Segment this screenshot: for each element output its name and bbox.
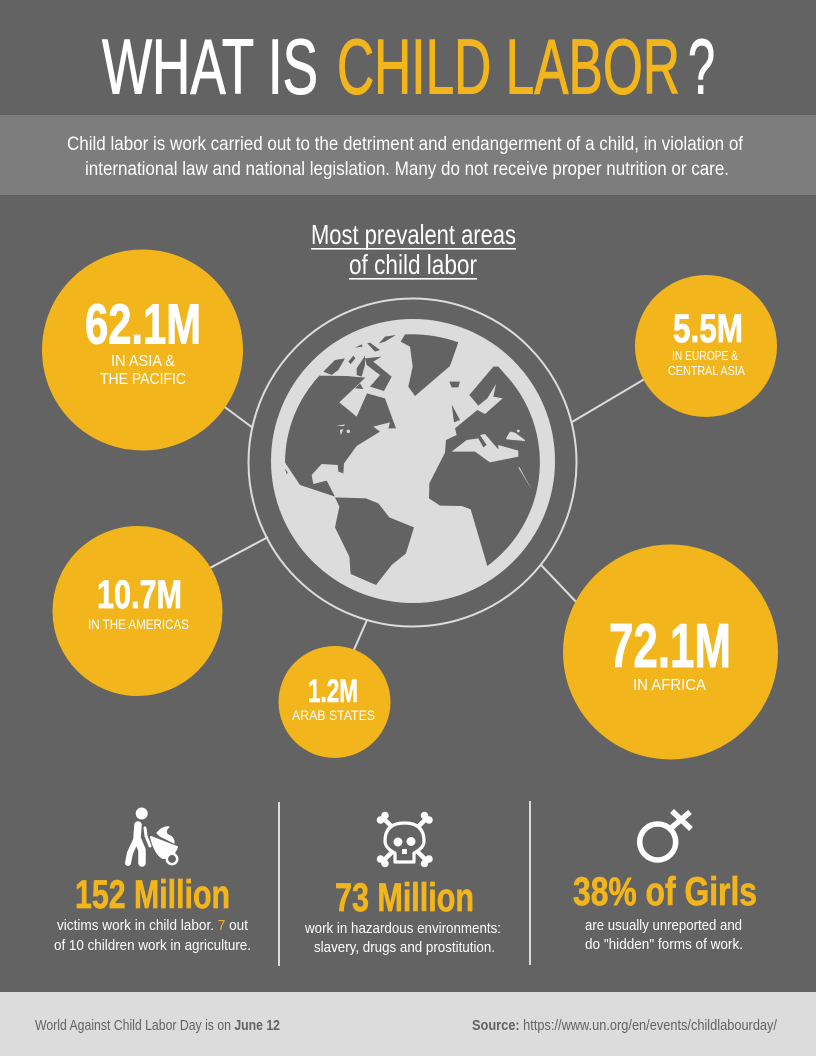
intro band [0,115,816,195]
stat: 38 percent of girls: do "hidden" forms of work. [585,937,743,953]
footer: World Against Child Labor Day is on June 12 [35,1018,280,1034]
bubble: asia and pacific: THE PACIFIC [100,371,186,388]
icon: worker with wheelbarrow [128,808,177,864]
bubble: europe and central asia [635,275,777,417]
bubble: africa [563,544,778,760]
stat: 38 percent of girls: are usually unreported and [585,918,742,934]
stat: 152 million: of 10 children work in agriculture. [54,938,251,954]
bubble: asia and pacific [42,250,243,450]
bubble: americas: IN THE AMERICAS [88,617,189,632]
bubble: arab states [278,646,390,758]
bubble: americas: 10.7M [97,573,182,617]
bubble: arab states: ARAB STATES [292,707,375,723]
intro band: Child labor is work carried out to the detriment and endangerment of a child, in violation of [67,134,744,155]
footer [0,992,816,1056]
title: ? [688,24,715,110]
stat: 73 million: 73 Million [335,876,474,920]
heading: most prevalent areas [311,219,516,280]
intro band: international law and national legislation. Many do not receive proper nutrition or care. [85,159,729,180]
stat: 38 percent of girls: 38% of Girls [573,870,757,914]
footer: Source: https://www.un.org/en/events/childlabourday/ [472,1018,778,1034]
icon: skull and crossbones [377,812,433,867]
bubble: asia and pacific: 62.1M [85,292,201,356]
stat: 73 million [304,876,501,956]
stat: 38 percent of girls [573,870,757,953]
stat: 73 million: slavery, drugs and prostitution. [314,940,495,956]
connector lines [208,377,648,652]
stat: 152 million: 152 Million [75,873,230,917]
heading: most prevalent areas: Most prevalent areas [311,219,516,250]
stat: 73 million: work in hazardous environments: [304,921,501,937]
bubble: africa: IN AFRICA [633,677,706,694]
globe [248,298,576,626]
bubble: americas [52,526,222,696]
bubble: arab states: 1.2M [308,673,358,709]
title [102,24,715,110]
bubble: asia and pacific: IN ASIA & [111,353,176,370]
icon: female symbol [640,811,691,860]
title: WHAT IS [102,24,318,110]
heading: most prevalent areas: of child labor [349,249,477,280]
bubble: europe and central asia: CENTRAL ASIA [668,364,746,378]
bubble: europe and central asia: IN EUROPE & [672,349,739,363]
stat: 152 million: victims work in child labor. 7 out [57,918,248,934]
bubble: africa: 72.1M [609,612,731,681]
stat: 152 million [54,873,251,954]
bubble: europe and central asia: 5.5M [673,307,743,351]
